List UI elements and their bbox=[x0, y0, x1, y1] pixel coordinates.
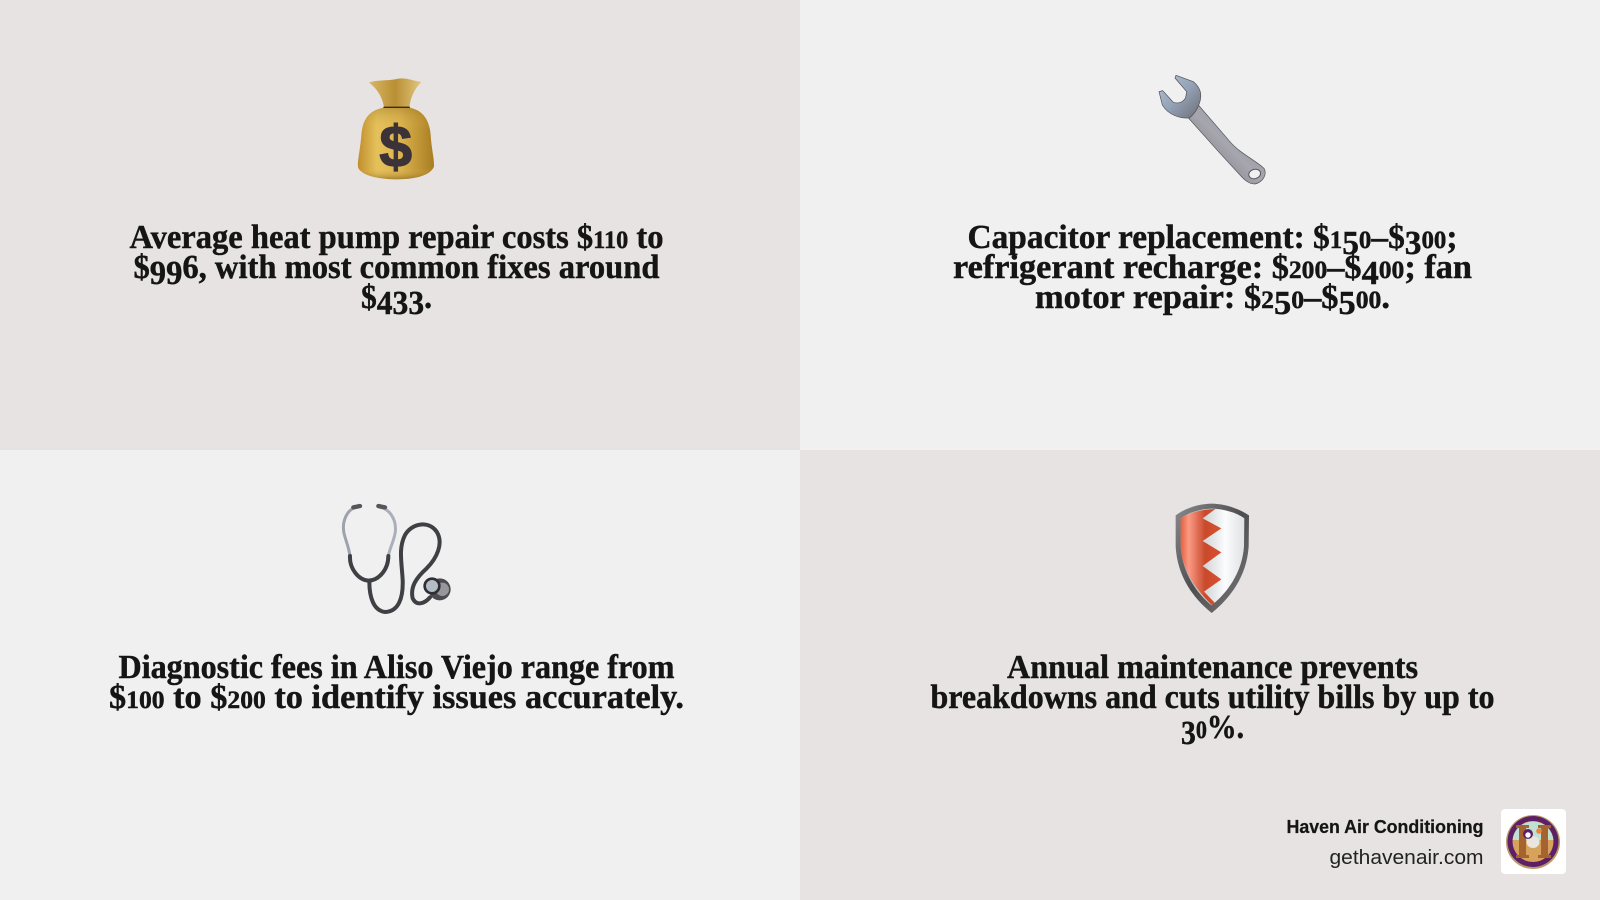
text: component prices: Capacitor replacement: $1 bbox=[968, 219, 1342, 256]
panel: diagnostic fees bbox=[0, 450, 800, 900]
icon: wrench bbox=[1159, 75, 1265, 184]
text: component prices: 0 bbox=[1291, 287, 1304, 314]
text: component prices: 00 bbox=[1379, 257, 1404, 284]
icon: money bag bbox=[358, 78, 434, 180]
text: average repair cost: Average heat pump repair costs $110 to bbox=[130, 219, 665, 256]
text: component prices: ; bbox=[968, 219, 1458, 262]
text: annual maintenance: %. bbox=[1181, 709, 1244, 752]
panel: annual maintenance bbox=[800, 450, 1600, 900]
brand url: gethavenair.com bbox=[1330, 847, 1484, 869]
icon: shield bbox=[1176, 504, 1249, 613]
text: component prices: 0 bbox=[1359, 227, 1371, 254]
panel: component replacement prices bbox=[800, 0, 1600, 450]
text: component prices: 3 bbox=[1405, 225, 1421, 262]
text: average repair cost: $ bbox=[361, 279, 432, 322]
text: average repair cost: 99 bbox=[150, 255, 182, 292]
text: component prices: 5 bbox=[1274, 285, 1291, 322]
icon glyph: dollar sign: $ bbox=[379, 115, 412, 180]
text: component prices: –$ bbox=[968, 219, 1458, 262]
text: average repair cost: . bbox=[424, 279, 432, 316]
text: component prices: refrigerant recharge: $ 200–$ bbox=[953, 249, 1361, 286]
text: component prices: . bbox=[1035, 279, 1390, 322]
text: component prices: 4 bbox=[1362, 255, 1379, 292]
brand name: Haven Air Conditioning bbox=[1286, 816, 1484, 837]
text: annual maintenance: 3 bbox=[1181, 715, 1196, 752]
logo bbox=[1501, 809, 1566, 874]
icon: stethoscope bbox=[343, 506, 451, 612]
panel: average repair cost bbox=[0, 0, 800, 450]
text: component prices: ; fan bbox=[953, 249, 1472, 292]
text: average repair cost: 6, with most common fixes around bbox=[182, 249, 660, 286]
text: component prices: 00 bbox=[1421, 227, 1446, 254]
text: annual maintenance: 0 bbox=[1196, 717, 1207, 744]
text: diagnostic fees: Diagnostic fees in Aliso Viejo range from bbox=[118, 649, 675, 686]
text: component prices: –$ bbox=[1035, 279, 1390, 322]
text: average repair cost: $ bbox=[134, 249, 660, 292]
text: average repair cost: 433 bbox=[377, 285, 424, 322]
text: component prices: 00 bbox=[1356, 287, 1381, 314]
text: annual maintenance: Annual maintenance prevents bbox=[1007, 649, 1418, 686]
text: component prices: motor repair: $2 bbox=[1035, 279, 1274, 316]
text: component prices: 5 bbox=[1342, 225, 1359, 262]
brand footer bbox=[1286, 809, 1566, 874]
text: component prices: 5 bbox=[1339, 285, 1356, 322]
text: annual maintenance: breakdowns and cuts utility bills by up to bbox=[930, 679, 1494, 716]
text: diagnostic fees: $100 to $200 to identify issues accurately. bbox=[109, 679, 674, 716]
